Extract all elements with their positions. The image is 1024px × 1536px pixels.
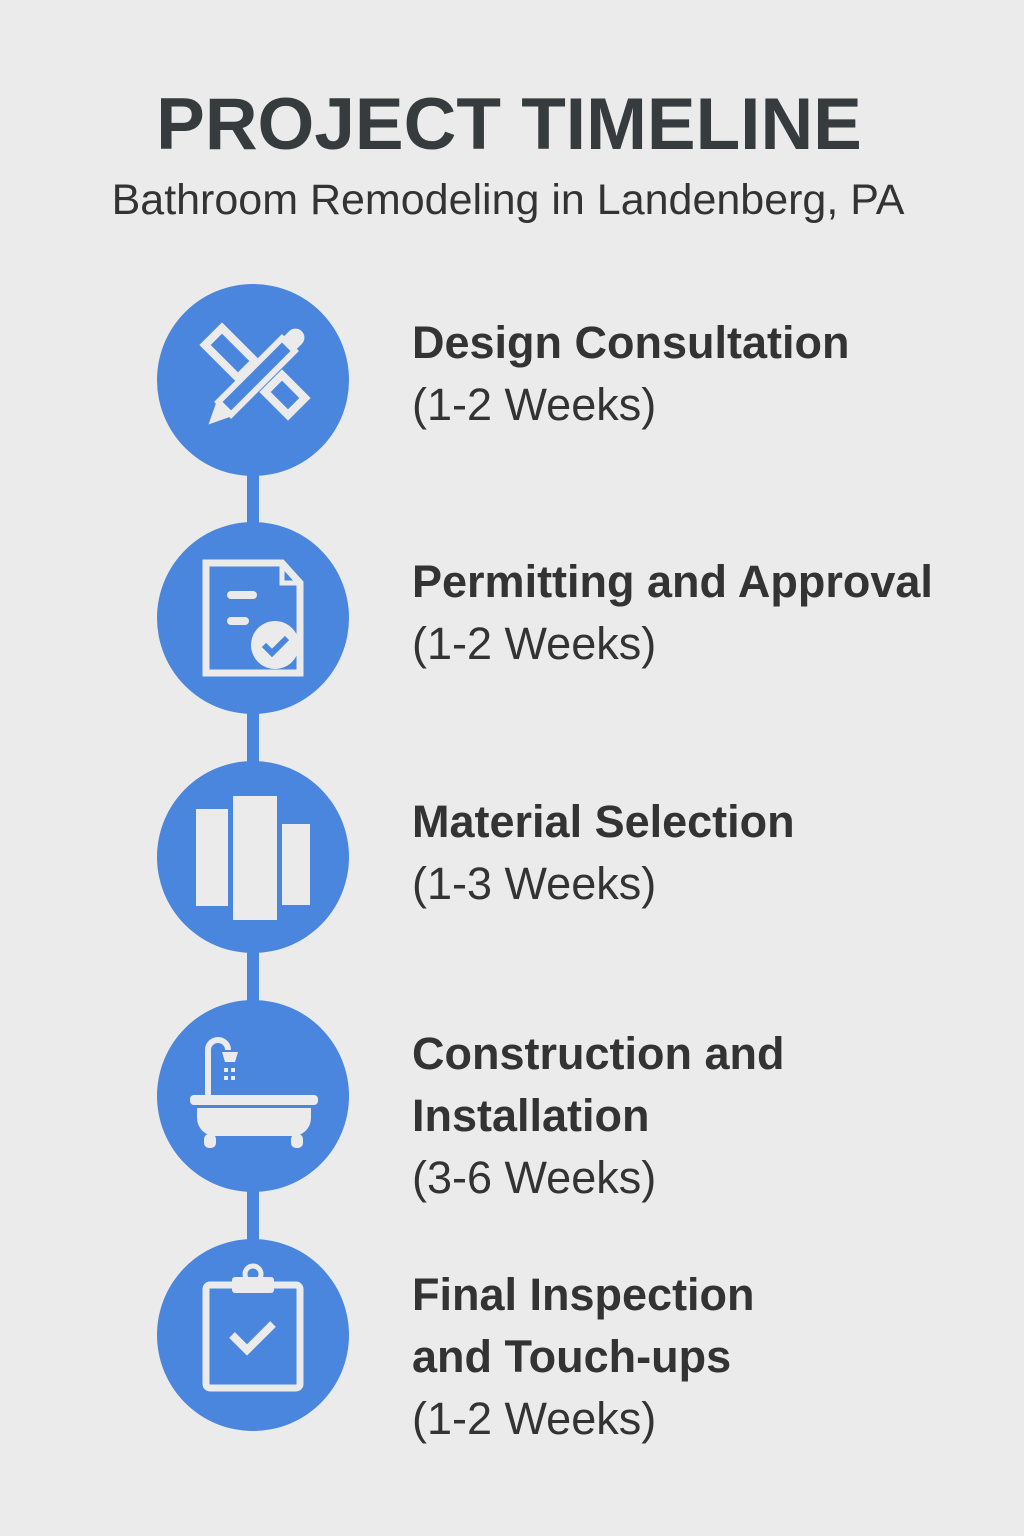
step 4 text: Installation — [412, 1090, 650, 1141]
icon: bathtub — [157, 1000, 349, 1192]
step 2 text: (1-2 Weeks) — [412, 618, 656, 669]
step 5 text: (1-2 Weeks) — [412, 1393, 656, 1444]
icon: design — [157, 284, 349, 476]
step 5 text — [412, 1269, 755, 1444]
step 3 text — [412, 796, 795, 909]
step 5 text: and Touch-ups — [412, 1331, 731, 1382]
icon: clipboard — [157, 1239, 349, 1431]
subtitle: Bathroom Remodeling in Landenberg, PA — [112, 176, 904, 224]
connector line — [247, 380, 259, 1335]
step 1 text — [412, 317, 850, 430]
step 1 text: Design Consultation — [412, 317, 850, 368]
step 5 text: Final Inspection — [412, 1269, 755, 1320]
step 4 text — [412, 1028, 784, 1203]
step 2 text: Permitting and Approval — [412, 556, 933, 607]
step 2 text — [412, 556, 933, 669]
step 3 text: Material Selection — [412, 796, 795, 847]
step 1 text: (1-2 Weeks) — [412, 379, 656, 430]
icon: material samples — [157, 761, 349, 953]
icon: permit document — [157, 522, 349, 714]
step 3 text: (1-3 Weeks) — [412, 858, 656, 909]
step 4 text: (3-6 Weeks) — [412, 1152, 656, 1203]
step 4 text: Construction and — [412, 1028, 784, 1079]
title: PROJECT TIMELINE — [156, 84, 862, 165]
